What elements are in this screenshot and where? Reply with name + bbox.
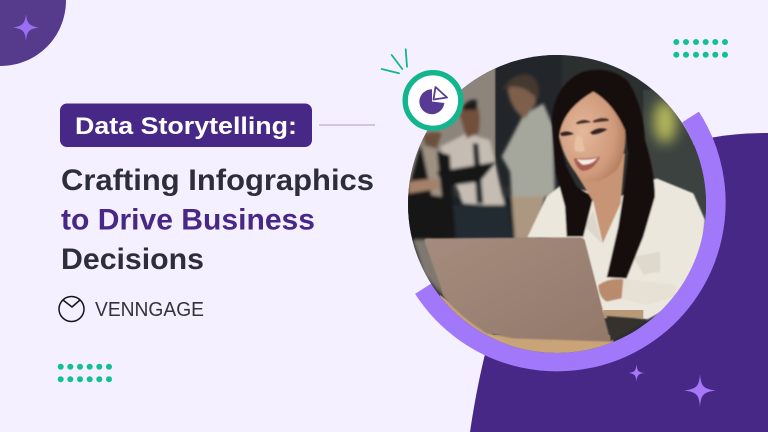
hair [552,70,655,278]
face [559,92,625,182]
photo background [408,55,706,353]
title: to Drive Business [61,204,315,236]
title [61,164,374,276]
connector line [319,124,375,126]
facial features [560,119,608,171]
icon: pie chart [419,87,447,114]
corner blob with star [0,0,66,66]
icon: corner star [13,14,39,41]
title: Crafting Infographics [61,164,374,197]
green foliage [653,100,677,143]
standing man [502,103,555,198]
shirt [527,70,705,320]
logo: Venngage [59,296,204,322]
badge: pie chart icon [405,73,461,128]
photo: woman on laptop [408,55,706,353]
table [440,295,614,353]
label pill: Data Storytelling [60,104,312,147]
rays above badge [382,49,407,73]
dot grid: bottom left [58,364,112,382]
title: Decisions [61,243,204,276]
middle man [440,133,505,207]
label pill: Data Storytelling: Data Storytelling: [75,113,297,140]
purple ring arc [424,117,716,361]
laptop [424,237,648,342]
hand [598,279,623,302]
left man dark suit [408,147,455,240]
icon: logo circle [59,296,84,322]
neck [575,153,625,243]
icon: large star [684,374,716,407]
dot grid: top right [673,39,728,58]
icon: small star [628,364,645,382]
logo: Venngage: VENNGAGE [95,299,204,321]
dark purple blob [470,133,768,432]
